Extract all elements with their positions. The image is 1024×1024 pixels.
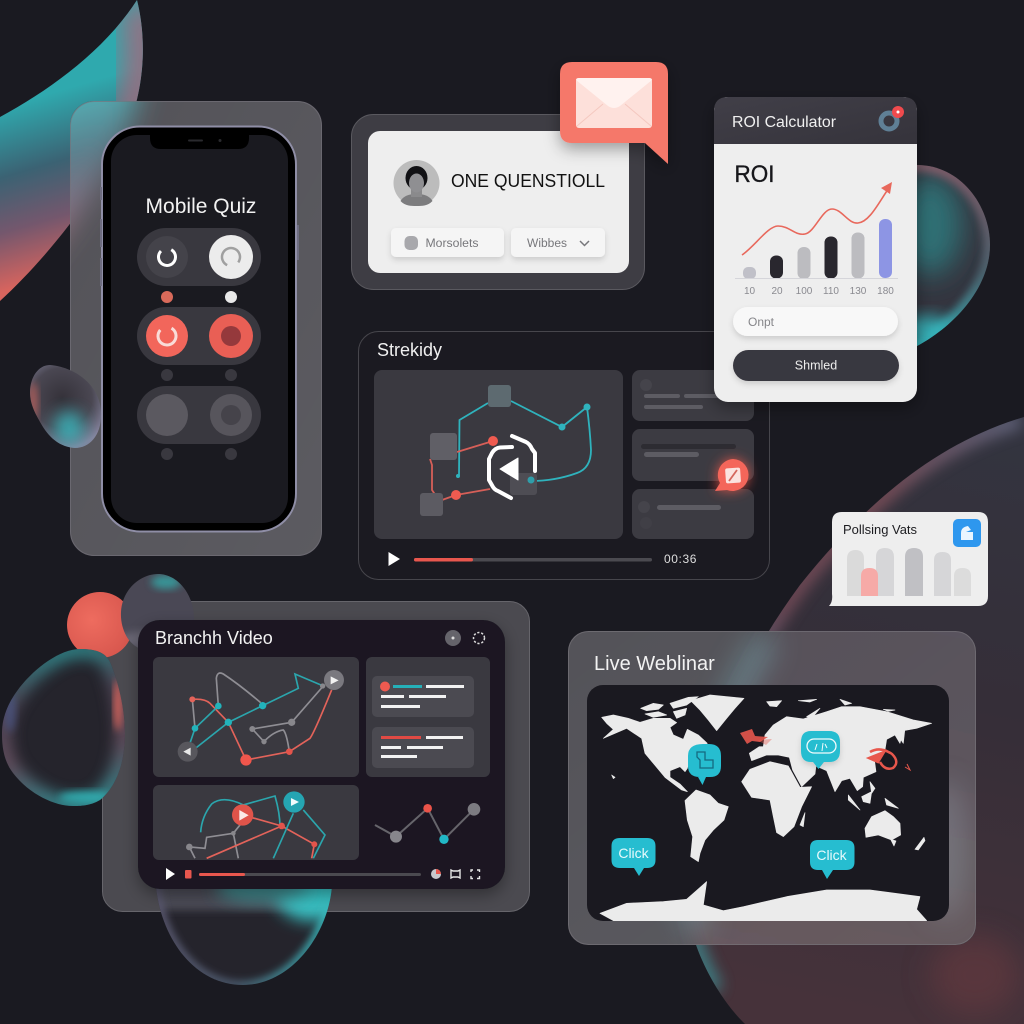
panel: mobile quiz [70, 101, 322, 556]
quiz row 3 [137, 386, 261, 460]
blob: bottom glass drop [156, 888, 332, 985]
blob: left glass drop [2, 649, 125, 806]
glass card [102, 602, 530, 912]
bar chart: 110 [823, 286, 839, 297]
phone [100, 126, 299, 532]
icon: settings ring [881, 106, 904, 129]
side card 1 [632, 370, 754, 421]
option button 1 [391, 228, 504, 257]
panel: ROI calculator [714, 97, 917, 402]
blob: small egg by phone [30, 365, 101, 448]
dark video card [138, 620, 505, 889]
bar chart: 130 [850, 286, 867, 297]
blob: top left gradient shape [0, 0, 143, 301]
hot spot: japan [869, 749, 910, 770]
branch graph: main [153, 657, 359, 777]
glass card [568, 631, 976, 945]
land: eurasia [749, 707, 932, 792]
world map [587, 685, 949, 921]
white card [368, 131, 629, 273]
icons: header [445, 630, 484, 646]
heading: Strekidy: Strekidy [377, 340, 442, 360]
icon: red comment badge [715, 459, 749, 491]
quiz row 1 [137, 228, 261, 303]
callout: Click 1: Click [618, 845, 650, 861]
icon: mail bubble [560, 62, 668, 164]
avatar [394, 160, 440, 206]
land: south america [685, 790, 728, 862]
panel: strategy video [358, 332, 770, 580]
header bar [714, 97, 917, 144]
panel: polling votes [829, 512, 988, 606]
land: arctic islands [641, 697, 698, 718]
panel: branch video [2, 574, 530, 985]
callout: Click 2 [810, 840, 854, 879]
transcript card 2 [372, 727, 474, 768]
panel: one question [352, 62, 668, 290]
callout: Click 1 [612, 838, 656, 876]
land: greenland [691, 695, 744, 731]
video controls: 00:36 [664, 552, 697, 566]
video controls [388, 552, 697, 566]
land: africa [742, 762, 812, 837]
heading: ROI Calculator: ROI Calculator [732, 114, 837, 131]
heading: ROI: ROI [734, 161, 774, 188]
branch graph: lower [153, 785, 359, 860]
callout: map pin 1 [688, 744, 721, 785]
blob: behind ROI calculator [917, 165, 990, 346]
bar chart: 10 [744, 286, 755, 297]
submit button: Shmled [795, 358, 837, 372]
callout: Click 2: Click [816, 847, 848, 863]
bar chart: 180 [877, 286, 894, 297]
video controls [166, 868, 480, 880]
blob: orange ball [67, 592, 133, 658]
blob: small glass bubble [120, 574, 192, 648]
line chart [375, 803, 480, 844]
heading: Polling: Pollsing Vats [843, 522, 917, 537]
land: australia [865, 811, 901, 840]
input field: Onpt [748, 315, 775, 329]
heading: question: ONE QUENSTIOLL [451, 170, 605, 191]
glass card [352, 114, 644, 290]
option button 2 [511, 228, 605, 257]
icon: blue badge [953, 519, 981, 547]
heading: Branch Video: Branchh Video [155, 628, 273, 648]
transcript panel [366, 657, 490, 777]
icon: center replay [489, 436, 535, 498]
blob: large bottom right sphere [686, 417, 1024, 1024]
callout: map pin 2 [801, 731, 840, 769]
panel: live webinar [568, 631, 976, 945]
land: north america [602, 715, 707, 792]
input field [733, 307, 898, 336]
bars [847, 548, 971, 596]
side card 3 [632, 489, 754, 539]
side card 2 [632, 429, 754, 481]
bar chart [735, 182, 898, 297]
bar chart: 20 [771, 286, 783, 297]
flow diagram area [374, 370, 623, 539]
heading: Live Webinar: Live Weblinar [594, 653, 715, 675]
land: small islands [612, 699, 925, 850]
quiz row 2 [137, 307, 261, 381]
glass card [70, 101, 322, 556]
transcript card 1 [372, 676, 474, 717]
option button 2: Wibbes [527, 238, 567, 250]
submit button [733, 350, 899, 381]
heading: Mobile Quiz: Mobile Quiz [146, 195, 256, 218]
hot spot: europe [740, 729, 772, 745]
land: antarctica [600, 882, 927, 921]
bar chart: 100 [796, 286, 813, 297]
option button 1: Morsolets [426, 238, 479, 250]
